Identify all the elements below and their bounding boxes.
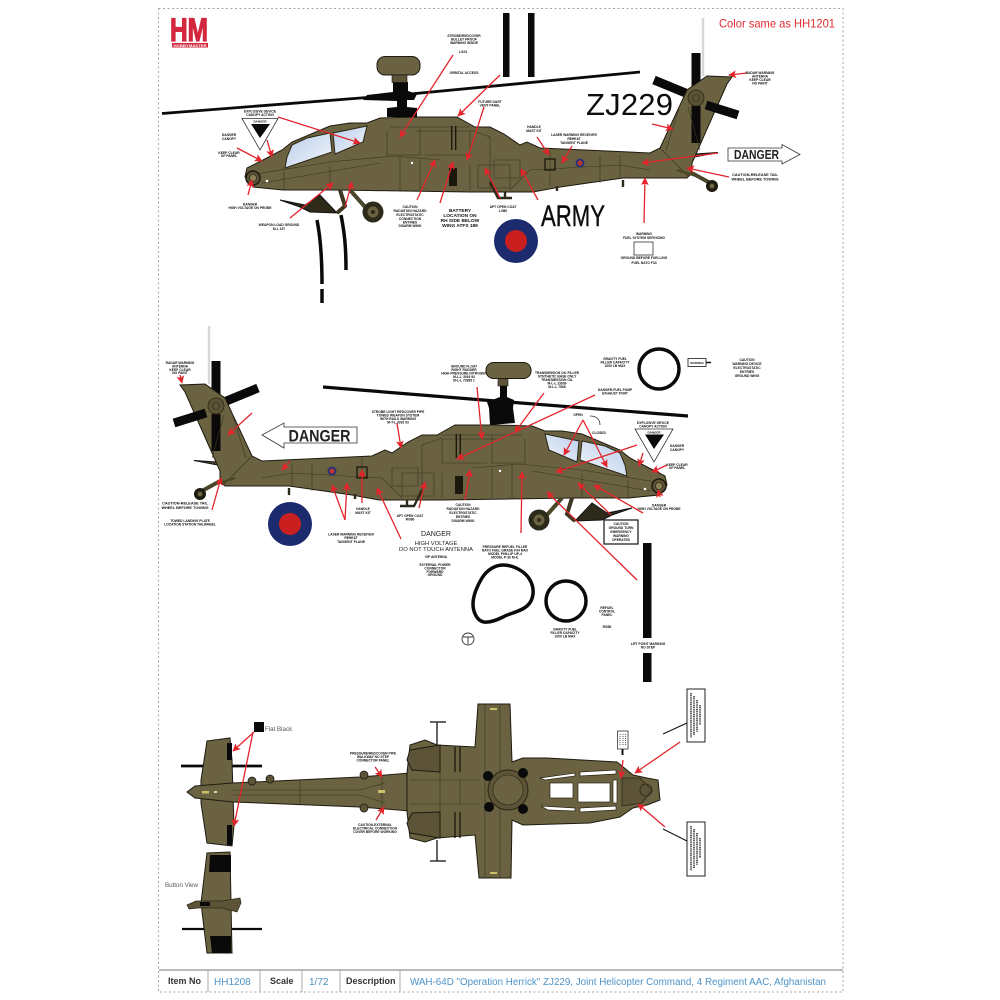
- small stencil notes, lower view: APT OPEN COAT: [397, 514, 423, 518]
- battery location note: LOCATION ON: [443, 213, 477, 219]
- black walkway stripes, top: [503, 13, 534, 77]
- small stencil notes, lower view: CANOPY: [670, 448, 685, 452]
- small stencil notes, top view: VENT PANEL: [480, 104, 500, 108]
- small stencil notes, lower view: FILLER CAPACITY: [550, 631, 580, 635]
- small stencil notes, lower view: HIGH VOLTAGE: [415, 541, 457, 547]
- caution placard, lower: CAUTION: [613, 522, 629, 526]
- caution placard, lower: [604, 520, 638, 544]
- small stencil notes, top view: CAUTION-RELEASE TAIL: [732, 173, 779, 177]
- small stencil notes, lower view: 1000 LB MAX: [605, 364, 626, 368]
- small stencil notes, lower view: GROUND FLOAT: [451, 364, 477, 368]
- small stencil notes, top view: DANGER: [222, 133, 237, 137]
- logo: HM Hobby Master: HOBBYMASTER: [174, 44, 207, 48]
- small stencil notes, lower view: NATO FUEL GRADE F34 MAX: [482, 548, 529, 552]
- caution placard, lower: OPERATED: [612, 538, 631, 542]
- small stencil notes, top view: CONNECTION: [399, 217, 422, 221]
- small stencil notes, lower view: MODEL P-30 M-IL: [491, 556, 519, 560]
- small stencil notes, top view: KEEP CLEAR: [749, 78, 771, 82]
- small stencil notes, lower view: LIFT POINT MARKING: [631, 642, 666, 646]
- roundel, top: [494, 219, 538, 263]
- small stencil notes, top view: REHEAT: [567, 137, 581, 141]
- small stencil notes, top view: DANGER: [243, 202, 258, 206]
- small notes, plan view: CONNECTOR PANEL: [356, 758, 390, 762]
- small notes, plan view: WALKWAY NO STEP: [357, 755, 390, 759]
- bottom view label: Button View: [165, 882, 198, 889]
- engine bulges: [407, 745, 440, 838]
- small stencil notes, top view: APT OPEN COAT: [490, 205, 516, 209]
- roundel, lower: [268, 502, 312, 546]
- small stencil notes, lower view: CAUTION-RELEASE TAIL: [162, 502, 209, 506]
- page frame: [158, 8, 843, 992]
- small stencil notes, top view: L/080: [499, 209, 507, 213]
- small stencil notes, lower view: EXHAUST PORT: [602, 392, 628, 396]
- small stencil notes, lower view: SYNTHETIC BASE ONLY: [538, 374, 577, 378]
- small stencil notes, lower view: MODEL PHILLIP UP-4: [488, 552, 522, 556]
- small stencil notes, top view: RADIATION HAZARD: [394, 209, 427, 213]
- small stencil notes, top view: L/104: [459, 50, 467, 54]
- rotor hub: [488, 770, 528, 810]
- small stencil notes, lower view: VIP ANTENNA: [425, 555, 448, 559]
- small placard beside fuel ring: WARNING: [690, 361, 704, 365]
- small stencil notes, lower view: RADIATION HAZARD: [447, 507, 480, 511]
- small stencil notes, top view: WHEEL BEFORE TOWING: [731, 178, 779, 182]
- footer: description: WAH-64D "Operation Herrick" ZJ229, Joint Helicopter Command, 4 Regiment AAC, Afghanistan: [410, 977, 826, 988]
- danger arrow, top: [728, 144, 800, 164]
- small stencil notes, lower view: DISARM WING: [452, 519, 475, 523]
- open/closed arc: [590, 416, 600, 425]
- small stencil notes, lower view: DANGER: [670, 444, 685, 448]
- small stencil notes, top view: DISARM WING: [399, 224, 422, 228]
- small stencil notes, lower view: M-T-L 3916 93: [387, 420, 409, 424]
- radome: [377, 56, 420, 75]
- data placard bottom: [663, 822, 705, 876]
- small stencil notes, lower view: ENTRIES: [456, 515, 471, 519]
- small notes, plan view: CAUTION-EXTERNAL: [358, 823, 392, 827]
- small stencil notes, top view: CANOPY ACTION: [246, 113, 274, 117]
- small notes, plan view: ELECTRICAL CONNECTION: [353, 826, 398, 830]
- small stencil notes, lower view: EXPLOSIVE DEVICE: [637, 421, 670, 425]
- hose stripes, top: [317, 215, 346, 303]
- small notes, plan view: COVER BEFORE WORKING: [353, 830, 397, 834]
- small stencil notes, lower view: HIGH PRESSURE NITROGEN: [441, 372, 487, 376]
- small stencil notes, lower view: REHEAT: [344, 536, 358, 540]
- small stencil notes, top view: OF PANEL: [221, 154, 237, 158]
- small stencil notes, top view: HIGH VOLTAGE ON PROBE: [228, 206, 272, 210]
- small stencil notes, top view: WARNING INSIDE: [450, 41, 479, 45]
- small stencil notes, lower view: FILLER CAPACITY: [600, 360, 630, 364]
- black walkway stripe, lower: [643, 543, 652, 682]
- flat black colour key: Flat Black: [265, 726, 293, 733]
- small stencil notes, lower view: PANEL: [602, 613, 612, 617]
- battery location note: [441, 208, 480, 229]
- small stencil notes, lower view: TOWED LANDING PLATE: [170, 519, 211, 523]
- footer: item number: HH1208: [214, 977, 251, 988]
- small stencil notes, top view: LASER WARNING RECEIVER: [551, 133, 598, 137]
- tail boom: [187, 773, 410, 811]
- horizontal stabilizer: [201, 738, 234, 846]
- small stencil notes, top view: NO PAINT: [752, 82, 768, 86]
- small notes, plan view: PRESSURE/REDCOVER PIPE: [350, 752, 397, 756]
- small stencil notes, top view: MAST KIT: [526, 129, 542, 133]
- small stencil notes, lower view: PRESSURE REFUEL FILLER: [483, 545, 528, 549]
- note: colour reference: Color same as HH1201: [719, 16, 835, 30]
- small stencil notes, lower view: M-L-L 72883 1: [453, 378, 475, 382]
- caution placard, lower: EMERGENCY: [610, 530, 632, 534]
- small stencil notes, lower view: [161, 357, 762, 650]
- warning placard, top view: [634, 242, 653, 255]
- canopy windows in plan: [540, 770, 617, 812]
- small stencil notes, lower view: DANGER: [421, 531, 451, 538]
- flat black colour key: [254, 722, 293, 733]
- small stencil notes, top view: STROBE/REDCOVER: [447, 34, 481, 38]
- small stencil notes, lower view: GRAVITY FUEL: [553, 628, 577, 632]
- small stencil notes, top view: FUEL SYSTEM SERVICING: [623, 236, 665, 240]
- small stencil notes, lower view: M-L-L 23699: [548, 382, 567, 386]
- danger arrow, lower: DANGER: [288, 426, 350, 446]
- footer table: [159, 970, 843, 992]
- small stencil notes, top view: WEAPON LOAD GROUND: [259, 223, 300, 227]
- small stencil notes, top view: M-L 197: [273, 227, 285, 231]
- small stencil notes, lower view: NO STEP: [641, 646, 656, 650]
- footer: description: Description: [346, 976, 396, 986]
- small stencil notes, lower view: 1000 LB MAX: [555, 634, 576, 638]
- small stencil notes, lower view: MAST KIT: [355, 511, 371, 515]
- small stencil notes, lower view: WITH RAILS WARNING: [380, 417, 416, 421]
- footer: scale: [270, 976, 329, 988]
- fuel cap rings: [473, 349, 679, 622]
- small stencil notes, lower view: TRANSMISSION OIL: [541, 378, 573, 382]
- rotor mast: [363, 82, 417, 117]
- danger triangle, lower: DANGER: [647, 430, 661, 434]
- small stencil notes, lower view: CAUTION: [739, 358, 755, 362]
- main rotor, lower view: [323, 387, 688, 416]
- data placard top: [663, 689, 705, 742]
- small stencil notes, lower view: WHEEL BEFORE TOWING: [161, 506, 209, 510]
- small stencil notes, lower view: HANDLE: [356, 507, 371, 511]
- top plan view of helicopter: [181, 704, 660, 878]
- small stencil notes, lower view: R/080: [603, 625, 612, 629]
- small stencil notes, top view: [218, 34, 779, 265]
- small stencil notes, top view: ANTENNA: [752, 74, 769, 78]
- small stencil notes, lower view: ANTENNA: [172, 364, 189, 368]
- fuselage and stub wing: [407, 704, 660, 878]
- small stencil notes, lower view: NO PAINT: [172, 371, 188, 375]
- small stencil notes, top view: HANDLE: [527, 125, 542, 129]
- small stencil notes, lower view: KEEP CLEAR: [169, 368, 191, 372]
- small stencil notes, top view: CAUTION: [402, 205, 418, 209]
- small stencil notes, lower view: CANOPY ACTION: [639, 424, 667, 428]
- bottom view stabilizer: [182, 852, 262, 953]
- small stencil notes, lower view: M-L-L 3916 93: [453, 375, 475, 379]
- callout arrows, lower view: [180, 375, 667, 580]
- small stencil notes, top view: RADAR WARNING: [746, 71, 775, 75]
- danger triangle, top: [242, 118, 278, 150]
- radome, lower view: [486, 362, 531, 386]
- small stencil notes, lower view: R/080: [406, 518, 415, 522]
- rotor mast, lower view: [487, 385, 515, 425]
- lettering: ZJ229: ZJ229: [586, 87, 673, 122]
- small stencil notes, lower view: CONNECTOR: [424, 566, 446, 570]
- small stencil notes, top view: FUTURE DART: [478, 100, 502, 104]
- danger triangle, lower: [635, 429, 673, 462]
- small stencil notes, lower view: EXTERNAL POWER: [419, 563, 451, 567]
- footer: scale: Scale: [270, 976, 294, 986]
- small stencil notes, top view: CANOPY: [222, 137, 237, 141]
- small stencil notes, lower view: ELECTROSTATIC: [733, 366, 761, 370]
- danger arrow, lower: [262, 423, 357, 448]
- small stencil notes, lower view: DANGER: [652, 504, 667, 508]
- small stencil notes, lower view: OF PANEL: [669, 466, 685, 470]
- small stencil notes, lower view: LOCATION STATION TAILWHEEL: [164, 522, 216, 526]
- small stencil notes, lower view: HIGH VOLTAGE ON PROBE: [637, 507, 681, 511]
- small stencil notes, top view: EXPLOSIVE DEVICE: [244, 110, 277, 114]
- nose placard: [618, 731, 628, 755]
- small stencil notes, lower view: CAUTION: [455, 503, 471, 507]
- nose turret in plan: [622, 778, 652, 806]
- small stencil notes, top view: ELECTROSTATIC: [396, 213, 424, 217]
- red arrows, plan view: [233, 732, 680, 827]
- small stencil notes, lower view: RADAR WARNING: [166, 361, 195, 365]
- battery location note: RH SIDE BELOW: [441, 218, 480, 224]
- danger arrow, top: DANGER: [734, 148, 779, 162]
- small placard beside fuel ring: [688, 358, 711, 366]
- small stencil notes, top view: ENTRIES: [403, 220, 418, 224]
- logo: HM Hobby Master: HM: [170, 12, 208, 48]
- caution placard, lower: GROUND TURN: [609, 526, 634, 530]
- small stencil notes, lower view: DO NOT TOUCH ANTENNA: [399, 547, 473, 553]
- small stencil notes, lower view: DANGER-FUEL PUMP: [598, 388, 633, 392]
- tail rotor blades in plan: [181, 765, 262, 767]
- footer: item number: Item No: [168, 976, 202, 986]
- small stencil notes, lower view: OPEN: [573, 413, 583, 417]
- small stencil notes, lower view: TANGENT PLANE: [337, 540, 366, 544]
- small stencil notes, top view: GROUND BEFORE FUELLING: [621, 256, 668, 260]
- small stencil notes, lower view: FORWARD: [427, 570, 444, 574]
- caution placard, lower: WARNING: [613, 534, 629, 538]
- small stencil notes, top view: KEEP CLEAR: [218, 151, 240, 155]
- small stencil notes, lower view: TOWED WEAPON SYSTEM: [377, 414, 419, 418]
- helicopter: left side view: [174, 326, 688, 530]
- footer: item number: [168, 976, 251, 988]
- small stencil notes, lower view: STROBE LIGHT REDCOVER PIPE: [372, 410, 425, 414]
- small stencil notes, top view: ORBITAL ACCESS: [450, 71, 479, 75]
- callout arrows, top view: [237, 55, 747, 223]
- small stencil notes, lower view: GROUND WING: [735, 374, 760, 378]
- battery location note: BATTERY: [449, 208, 472, 214]
- small stencil notes, top view: FUEL NATO F34: [631, 261, 657, 265]
- battery location note: WING ATFS 189: [442, 223, 478, 229]
- small stencil notes, lower view: CLOSED: [592, 431, 606, 435]
- refuel panel icon: [462, 633, 474, 645]
- small stencil notes, lower view: RIGHT RUDDER: [451, 368, 477, 372]
- small stencil notes, top view: TANGENT PLANE: [560, 141, 589, 145]
- small stencil notes, lower view: KEEP CLEAR: [666, 463, 688, 467]
- small stencil notes, lower view: REFUEL: [600, 606, 614, 610]
- small notes, plan view: [350, 752, 398, 834]
- main rotor, top view: [162, 72, 640, 114]
- small stencil notes, lower view: ELECTROSTATIC: [449, 511, 477, 515]
- small stencil notes, lower view: WARNING DEVICE: [732, 362, 762, 366]
- pylon mounts: [430, 722, 446, 861]
- small stencil notes, lower view: M-L-L 7808: [548, 385, 566, 389]
- small stencil notes, lower view: ENTRIES: [740, 370, 755, 374]
- small stencil notes, lower view: CONTROL: [599, 610, 615, 614]
- lettering: ARMY: ARMY: [541, 200, 605, 233]
- small stencil notes, lower view: GRAVITY FUEL: [603, 357, 627, 361]
- footer: scale: 1/72: [309, 977, 329, 988]
- small stencil notes, lower view: LASER WARNING RECEIVER: [328, 532, 375, 536]
- small stencil notes, lower view: TRANSMISSION OIL FILLER: [535, 371, 580, 375]
- small stencil notes, top view: BULLET PROOF: [451, 38, 477, 42]
- small stencil notes, top view: WARNING: [636, 232, 652, 236]
- danger triangle, top: DANGER: [253, 120, 267, 124]
- helicopter: right side view: [162, 18, 738, 222]
- small stencil notes, lower view: GROUND: [428, 573, 443, 577]
